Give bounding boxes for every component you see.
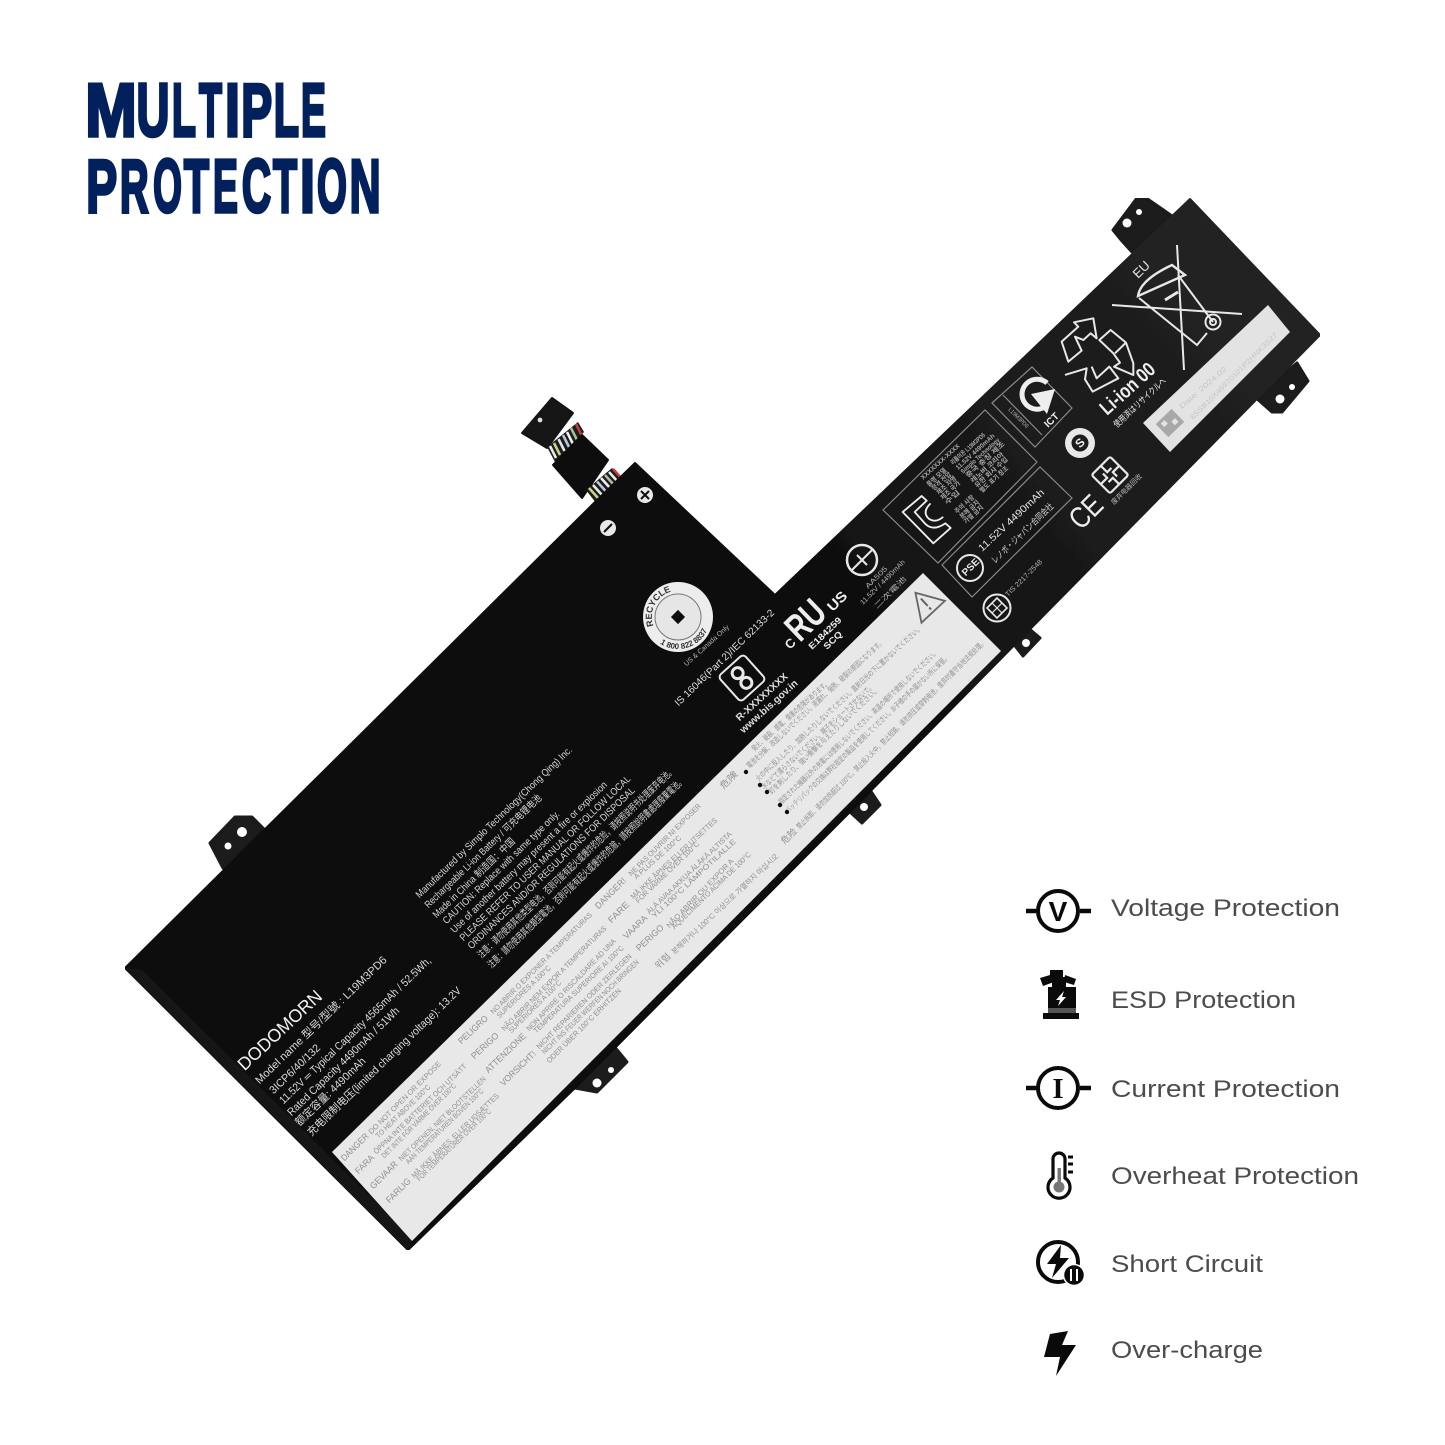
KC box small print: 별도 표기 참조 bbox=[977, 464, 1010, 494]
warning label: multilingual columns: FARE bbox=[606, 899, 631, 925]
warning label: multilingual columns: 위험 bbox=[653, 951, 673, 971]
title: R bbox=[120, 144, 149, 228]
ICT certification box: L19M3PD6 bbox=[1007, 407, 1030, 430]
KC box small print: 11.52V 4490mAh bbox=[955, 433, 997, 471]
spec text block: Model name 型号/型號 : L19M3PD6 bbox=[252, 953, 390, 1087]
Li-ion 00 text: Li-ion 00 bbox=[1096, 359, 1160, 420]
warning label: multilingual columns: TEMPERATURA SUPERIORE AI 100°C bbox=[532, 943, 626, 1035]
warning label: Japanese and Chinese text: 禁止拆卸、请勿加热超过 100°C，禁止投入火中，禁止短路，请勿挤压或穿刺电池，废弃时遵守当地法规处理。 bbox=[794, 637, 988, 831]
circled S mark bbox=[1065, 428, 1095, 458]
KC box small print: 제조 국가 bbox=[938, 479, 962, 501]
warning label: multilingual columns: NICHT REPARIEREN ODER ZERLEGEN bbox=[535, 952, 634, 1051]
title: P bbox=[241, 68, 272, 152]
warning label: Japanese and Chinese text: 火の中に投入したり、加熱したりしないでください。直射日光の下に置かないでください。 bbox=[753, 623, 924, 783]
round approval mark: 11.52V / 4490mAh bbox=[859, 559, 907, 606]
item: current protection bbox=[1026, 1068, 1340, 1108]
warning label: multilingual columns: MÅ IKKE ÅBNES, ELLER UDSÆTTES bbox=[410, 1091, 501, 1180]
certification text: US & Canada Only bbox=[683, 624, 731, 668]
item: overheat protection bbox=[1048, 1153, 1359, 1198]
warning label: multilingual columns: NE PAS OUVRIR NI EXPOSER bbox=[627, 801, 703, 878]
body bevel edge bbox=[125, 968, 412, 1250]
warning label: multilingual columns: ÖPPNA INTE BATTERIET OCH UTSÄTT bbox=[372, 1062, 469, 1156]
warning label: Japanese and Chinese text: バッテリパックの交換は弊社指定の製品を使用してください。お子様の手の届かない所に保管。 bbox=[783, 652, 951, 815]
warning label: multilingual columns: PELIGRO bbox=[456, 1013, 490, 1046]
KC box small print: 유한 회사 수입 bbox=[972, 455, 1010, 489]
KC box small print: 리튬이온 L19M3PD6 bbox=[948, 430, 987, 466]
manufacturer and caution text: PLEASE REFER TO USER MANUAL OR FOLLOW LOCAL bbox=[458, 774, 633, 944]
protection list bbox=[1026, 891, 1359, 1376]
warning label: multilingual columns: A PLUS DE 100°C bbox=[632, 833, 684, 881]
warning label: multilingual columns: NON APRIRE O RISCALDARE AD UNA bbox=[524, 937, 618, 1033]
warning label: Japanese and Chinese text bbox=[717, 623, 988, 846]
title: L bbox=[274, 68, 299, 152]
KC box small print: 분해 금지 bbox=[957, 498, 981, 520]
PSE certification box: 11.52V 4490mAh bbox=[977, 487, 1047, 554]
title: I bbox=[225, 68, 240, 152]
warning label: multilingual columns: NIET OPENEN, NIET BLOOTSTELLEN bbox=[397, 1074, 488, 1163]
warning label: multilingual columns: DANGER bbox=[339, 1131, 371, 1163]
TIS mark bbox=[984, 559, 1044, 622]
warning label: Japanese and Chinese text: 電池を分解、改造しないでください。液漏れ、発熱、破裂の原因になります。 bbox=[744, 637, 885, 770]
warning label: multilingual columns: PERIGO bbox=[469, 1030, 501, 1061]
warning label: multilingual columns: GEVAAR bbox=[368, 1159, 400, 1191]
KC box small print: 주의 사항 bbox=[952, 493, 976, 515]
KC box small print: 제조 자명 bbox=[934, 474, 958, 496]
warning label: multilingual columns: DO NOT OPEN OR EXPOSE bbox=[367, 1060, 443, 1136]
certification text bbox=[673, 607, 801, 736]
item: voltage protection bbox=[1026, 891, 1340, 931]
UL mark: RU bbox=[777, 591, 835, 649]
main warning label bbox=[332, 573, 1001, 1241]
warning label: multilingual columns: PERIGO bbox=[634, 922, 666, 953]
TIS mark: TIS 2217-2548 bbox=[1004, 559, 1044, 598]
warning label: multilingual columns: NÃO ABRIR NEM EXPOR A TEMPERATURAS bbox=[500, 924, 608, 1033]
warning label: multilingual columns: ÄLÄ AVAA AKKUA ÄLÄKÄ ALTISTA bbox=[645, 830, 734, 916]
manufacturer and caution text: CAUTION: Replace with same type only. bbox=[441, 809, 562, 927]
connector cable bbox=[522, 398, 622, 503]
spec text block: 3ICP6/40/132 bbox=[267, 1042, 323, 1097]
recycling arrows bbox=[1062, 318, 1133, 392]
round approval mark bbox=[847, 545, 908, 610]
icon: thermometer bbox=[1048, 1153, 1073, 1198]
recycle disc: 1 800 822 8837 bbox=[660, 628, 706, 649]
warning label: Japanese and Chinese text: 発火、破裂、感電、傷害の危険があります。 bbox=[749, 678, 831, 753]
title: E bbox=[213, 144, 238, 228]
warning label: multilingual columns: ATTENZIONE bbox=[483, 1031, 528, 1075]
round approval mark: 二次電池 bbox=[872, 574, 908, 610]
KC box small print: 가열 금지 bbox=[961, 503, 985, 525]
item: short circuit bbox=[1038, 1242, 1263, 1286]
KC box small print: Simplo Technology bbox=[960, 437, 1002, 475]
item: ESD protection bbox=[1040, 970, 1296, 1019]
warning label: Japanese and Chinese text: 危险 bbox=[778, 826, 799, 846]
KC certification box bbox=[883, 410, 1037, 563]
warning label: multilingual columns: MÅ IKKE ÅPNES ELLER UTSETTES bbox=[629, 816, 719, 901]
spec text block: 充电限制电压(limited charging voltage): 13.2V bbox=[304, 983, 464, 1139]
UL mark: SCQ bbox=[821, 629, 844, 651]
manufacturer and caution text: ORDINANCES AND/OR REGULATIONS FOR DISPOSAL bbox=[466, 785, 638, 952]
serial label text: Date: 2024.02 bbox=[1179, 366, 1229, 411]
warning triangle bbox=[904, 582, 945, 623]
title: O bbox=[153, 144, 182, 228]
title: E bbox=[301, 68, 326, 152]
spec text block: Rated Capacity 4490mAh / 51Wh bbox=[285, 1005, 402, 1119]
warning label: multilingual columns: SUPERIORES A 100°C bbox=[507, 978, 563, 1035]
crossed-out bin: EU bbox=[1130, 258, 1153, 281]
icon: voltage meter: V bbox=[1049, 896, 1068, 927]
warning label: multilingual columns bbox=[339, 801, 781, 1205]
warning label: Japanese and Chinese text: 釘を刺したり、強い衝撃を与えたりしないでください。 bbox=[766, 685, 881, 796]
recycling square mark: 废弃电器回收 bbox=[1109, 472, 1144, 506]
item: over-charge bbox=[1044, 1331, 1263, 1376]
title: C bbox=[242, 144, 271, 228]
warning label: Japanese and Chinese text: 危険 bbox=[717, 768, 740, 791]
item: over-charge: Over-charge bbox=[1111, 1337, 1263, 1364]
icon: ESD tower bbox=[1040, 970, 1079, 1019]
KC box small print: 품명 모델 bbox=[924, 466, 948, 488]
KC box small print: 중국 충칭 제조 bbox=[963, 439, 1007, 479]
warning label: multilingual columns: FARA bbox=[353, 1153, 376, 1176]
warning label: multilingual columns: YLI 100°C LÄMPÖTILALLE bbox=[650, 837, 738, 920]
battery photo bbox=[125, 198, 1320, 1250]
item: voltage protection: Voltage Protection bbox=[1111, 895, 1340, 922]
warning label: multilingual columns: NO ABRIR O EXPONER A TEMPERATURAS bbox=[489, 911, 594, 1016]
warning label: multilingual columns: ODER ÜBER 100°C ERHITZEN bbox=[545, 986, 623, 1065]
icon: voltage meter bbox=[1026, 891, 1091, 931]
title: T bbox=[199, 68, 222, 152]
item: short circuit: Short Circuit bbox=[1111, 1251, 1263, 1278]
icon: short circuit bbox=[1038, 1242, 1084, 1286]
title: T bbox=[273, 144, 297, 228]
circled S mark: S bbox=[1072, 435, 1088, 451]
warning label: multilingual columns: FARLIG bbox=[384, 1176, 413, 1205]
recycling square mark bbox=[1092, 457, 1144, 506]
warning label: multilingual columns: SUPERIORES A 100°C bbox=[495, 963, 553, 1020]
warning label: multilingual columns: FOR VARME OVER 100°C bbox=[634, 839, 701, 905]
item: current protection: Current Protection bbox=[1111, 1076, 1340, 1103]
warning label: multilingual columns: AQUECIMENTO ACIMA DE 100°C bbox=[670, 850, 753, 931]
serial label text: 8SSB10X45970101P2HNK3S27 bbox=[1189, 332, 1279, 421]
manufacturer and caution text bbox=[414, 745, 687, 971]
crossed-out bin bbox=[1112, 245, 1242, 370]
spec text block: 额定容量: 4490mAh bbox=[292, 1054, 368, 1129]
warning label: multilingual columns: DANGER! bbox=[593, 876, 628, 911]
manufacturer and caution text: Made in China 制造国：中国 bbox=[430, 835, 518, 921]
KC box small print bbox=[920, 430, 1010, 525]
CE mark: CE bbox=[1063, 489, 1110, 536]
ICT certification box: ICT bbox=[1042, 411, 1062, 430]
title: O bbox=[317, 144, 347, 228]
spec text block: 11.52V ═ Typical Capacity 4565mAh / 52.5Wh, bbox=[277, 955, 434, 1107]
icon: current meter bbox=[1026, 1068, 1091, 1108]
spec text block: DODOMORN bbox=[234, 986, 326, 1074]
warning label: multilingual columns: DET INTE FÖR VÄRME ÖVER 100°C bbox=[380, 1081, 458, 1160]
spec text block bbox=[234, 953, 464, 1139]
manufacturer and caution text: 注意：请勿使用其他类型电池，否则可能有起火或爆炸的危险，请按照说明书处理废弃电池。 bbox=[475, 764, 677, 961]
warning label: multilingual columns: NÃO ABRIR OU EXPOR A bbox=[664, 857, 736, 930]
KC box small print: XXXXXXX-XXXX bbox=[920, 442, 962, 481]
UL mark: C bbox=[782, 634, 799, 652]
manufacturer and caution text: 注意：請勿使用其他類型電池，否則可能有起火或爆炸的危險，請按照說明書處理廢棄電池。 bbox=[485, 774, 687, 971]
title: U bbox=[137, 68, 170, 152]
title: I bbox=[300, 144, 315, 228]
PSE certification box: レノボ・ジャパン合同会社 bbox=[989, 501, 1055, 565]
title bbox=[85, 68, 381, 228]
icon: current meter: I bbox=[1052, 1073, 1064, 1105]
Li-ion 00 text: 使用済はリサイクルへ bbox=[1111, 375, 1168, 429]
recycle disc bbox=[643, 582, 713, 652]
KC mark bbox=[903, 496, 951, 543]
warning label: Japanese and Chinese text: 水などで濡らさないでください。端子をショートさせないで。 bbox=[759, 681, 876, 791]
KC box small print: 정격 전압 bbox=[929, 470, 953, 492]
recycle disc: RECYCLE bbox=[646, 586, 671, 627]
mounting tabs bbox=[210, 198, 1308, 1095]
serial label QR code bbox=[1156, 409, 1184, 437]
item: ESD protection: ESD Protection bbox=[1111, 987, 1296, 1014]
warning label: multilingual columns: VAARA bbox=[621, 913, 649, 941]
PSE certification box: PSE bbox=[960, 556, 982, 579]
certification text: R-XXXXXXXX bbox=[734, 671, 791, 724]
KC box small print: 레노버 코리아 bbox=[968, 450, 1006, 484]
title: L bbox=[172, 68, 196, 152]
item: overheat protection: Overheat Protection bbox=[1111, 1163, 1359, 1190]
UL mark: E184259 bbox=[806, 615, 844, 651]
warning label: multilingual columns: VORSICHT! bbox=[498, 1049, 538, 1088]
certification text: IS 16046(Part 2)/IEC 62133-2 bbox=[673, 607, 777, 709]
warning label: multilingual columns: TO HEAT ABOVE 100°C bbox=[374, 1082, 433, 1140]
title: T bbox=[184, 144, 209, 228]
round approval mark: AA505 bbox=[864, 566, 889, 590]
ICT certification box bbox=[992, 367, 1072, 447]
title: M bbox=[85, 68, 137, 152]
PSE certification box bbox=[942, 467, 1072, 597]
warning label: multilingual columns: NICHT INS FEUER WERFEN NOCH BRINGEN bbox=[540, 958, 641, 1056]
warning label: multilingual columns: 분해하거나 100°C 이상으로 가열하지 마십시오 bbox=[669, 851, 781, 956]
serial label bbox=[1143, 305, 1290, 452]
battery body bbox=[125, 199, 1320, 1250]
title: P bbox=[86, 144, 117, 228]
certification text: www.bis.gov.in bbox=[737, 678, 801, 736]
tab holes bbox=[224, 209, 1295, 1088]
screw markers bbox=[600, 487, 653, 536]
UL mark: US bbox=[824, 588, 850, 614]
manufacturer and caution text: Manufactured by Simplo Technology(Chong Qing) Inc. bbox=[414, 745, 575, 901]
icon: lightning bolt bbox=[1044, 1331, 1076, 1376]
serial label text bbox=[1179, 332, 1279, 421]
manufacturer and caution text: Rechargeable Li-ion Battery / 可充电锂电池 bbox=[422, 792, 544, 911]
BIS mark bbox=[718, 654, 766, 702]
KC box small print: 수입 bbox=[942, 488, 962, 506]
warning label: Japanese and Chinese text: 指定された機器以外の充電には使用しないでください。高温の場所で使用しないでください。 bbox=[776, 647, 940, 806]
warning label: multilingual columns: FOR TEMPERATURER OVER 100°C bbox=[415, 1107, 493, 1183]
warning label: multilingual columns: AAN TEMPERATUREN BOVEN 100°C bbox=[404, 1086, 486, 1166]
title: N bbox=[350, 144, 381, 228]
manufacturer and caution text: Use of another battery may present a fire or explosion bbox=[449, 780, 610, 936]
warning label bullets bbox=[744, 770, 789, 814]
